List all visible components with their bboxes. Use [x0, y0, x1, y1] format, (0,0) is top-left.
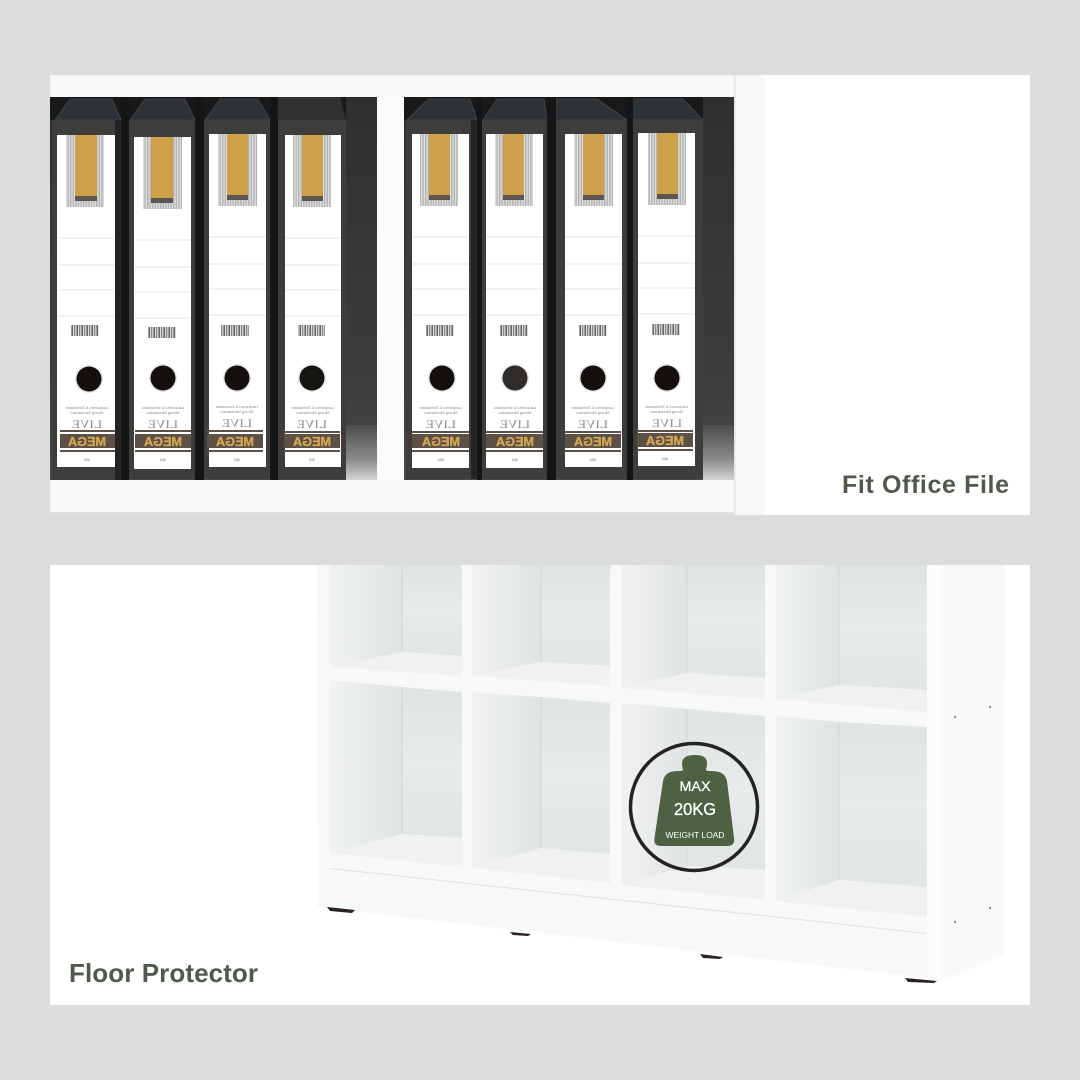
binder 1: Lacquered & Embossed — [66, 405, 108, 410]
binder 8: Lacquered & Embossed — [646, 404, 688, 409]
binder 2: Lacquered & Embossed — [142, 405, 184, 410]
binder 6: Lacquered & Embossed — [494, 405, 536, 410]
bookcase — [317, 565, 1005, 981]
binder 2 — [121, 97, 195, 480]
binder 3: Strong Mechanism — [220, 409, 254, 414]
binder 2: MEGA — [144, 435, 182, 449]
binder 4: Strong Mechanism — [296, 410, 330, 415]
lower cells — [330, 680, 927, 917]
text: 20kg: 20KG — [674, 799, 716, 819]
binder 6: 404 — [512, 458, 518, 462]
floor protector feet — [327, 907, 937, 983]
binder 6: LIVE — [500, 417, 530, 431]
binder 1 — [52, 99, 121, 480]
binder 3: MEGA — [216, 435, 254, 449]
binder 2: 404 — [160, 458, 166, 462]
panel: floor protector — [50, 565, 1030, 1005]
binder 1: LIVE — [72, 417, 102, 431]
binder 5: Strong Mechanism — [424, 410, 458, 415]
binder 4: Lacquered & Embossed — [292, 405, 334, 410]
binder 1: 404 — [84, 458, 90, 462]
binder 7: 404 — [590, 458, 596, 462]
binder 5: 404 — [438, 458, 444, 462]
icon: weight — [654, 755, 734, 846]
binder 7 — [547, 97, 627, 480]
binder 3: 404 — [234, 458, 240, 462]
binder 2: LIVE — [148, 417, 178, 431]
text: max: MAX — [680, 778, 711, 794]
heading: floor protector: Floor Protector — [69, 958, 258, 988]
binder 6: MEGA — [496, 435, 534, 449]
binder 5: MEGA — [422, 435, 460, 449]
binder 4 — [270, 97, 346, 480]
binder 7: MEGA — [574, 435, 612, 449]
binder 7: Lacquered & Embossed — [572, 405, 614, 410]
binder 1: Strong Mechanism — [70, 410, 104, 415]
binder 4: 404 — [309, 458, 315, 462]
binder 4: LIVE — [297, 417, 327, 431]
binder 5: LIVE — [426, 417, 456, 431]
binder 1: MEGA — [68, 435, 106, 449]
binder 8: LIVE — [652, 416, 682, 430]
binder 6: Strong Mechanism — [498, 410, 532, 415]
weight load badge — [630, 744, 758, 870]
text: weight load: WEIGHT LOAD — [666, 831, 725, 840]
binder 7: Strong Mechanism — [576, 410, 610, 415]
binder 8 — [627, 97, 703, 480]
binder 7: LIVE — [578, 417, 608, 431]
upper cells — [330, 565, 927, 712]
binder 5 — [406, 99, 477, 479]
shelf frame — [50, 75, 765, 515]
panel: fit office file — [50, 75, 1030, 515]
binder 8: Strong Mechanism — [650, 409, 684, 414]
binder 8: MEGA — [646, 434, 684, 448]
binder 3 — [195, 97, 270, 480]
binder 5: Lacquered & Embossed — [420, 405, 462, 410]
heading: fit office file: Fit Office File — [842, 471, 1009, 499]
binder 3: Lacquered & Embossed — [216, 404, 258, 409]
binder 8: 404 — [662, 457, 668, 461]
binder 3: LIVE — [222, 416, 252, 430]
binder 6 — [477, 97, 547, 480]
shelf fronts and dividers — [330, 565, 927, 902]
binder 4: MEGA — [293, 435, 331, 449]
binder 2: Strong Mechanism — [146, 410, 180, 415]
side panel screws — [954, 706, 991, 923]
